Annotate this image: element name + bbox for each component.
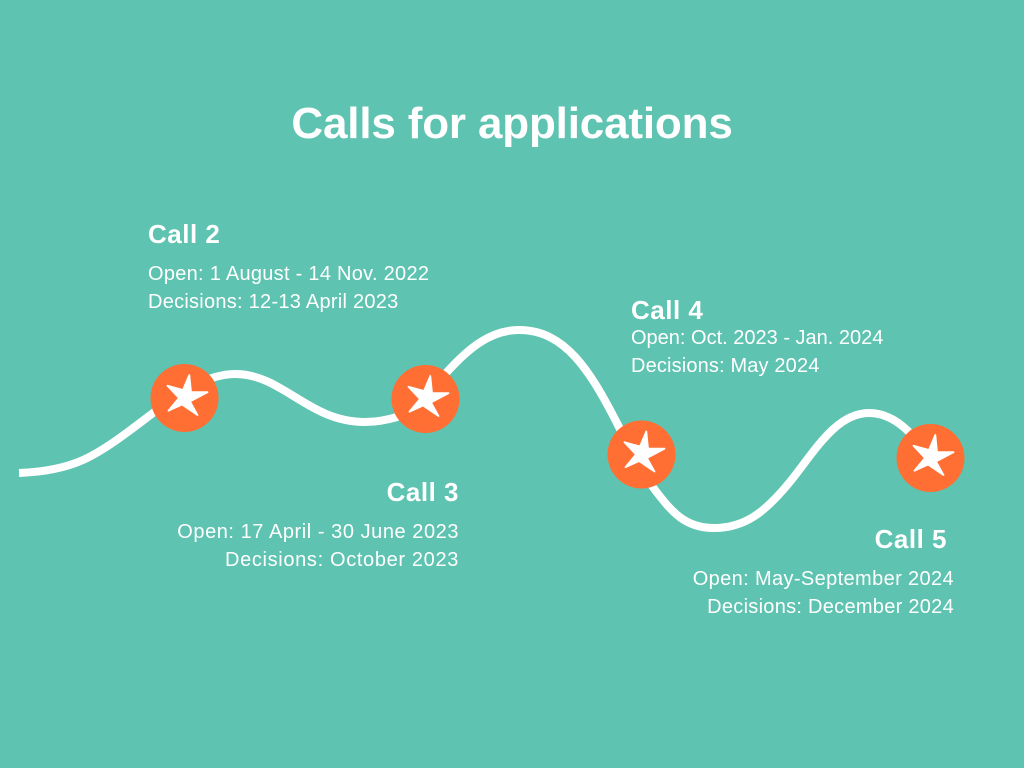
call 4 heading: Call 4 [631, 295, 703, 325]
call 3 dates: Decisions: October 2023 [225, 549, 459, 571]
call 2 heading: Call 2 [148, 219, 220, 249]
call 4 dates: Decisions: May 2024 [631, 355, 820, 377]
marker: call 3 [392, 365, 460, 433]
call 3 dates: Open: 17 April - 30 June 2023 [177, 521, 459, 543]
call 5 heading: Call 5 [875, 524, 947, 554]
marker: call 2 [150, 364, 218, 432]
call 2 dates: Open: 1 August - 14 Nov. 2022 [148, 263, 429, 285]
call 2 dates: Decisions: 12-13 April 2023 [148, 291, 398, 313]
title: Calls for applications [291, 99, 733, 148]
call 4 dates: Open: Oct. 2023 - Jan. 2024 [631, 327, 883, 349]
call 4 dates [631, 327, 883, 377]
call 5 dates: Open: May-September 2024 [693, 568, 954, 590]
timeline curve [19, 330, 909, 528]
call 3 heading: Call 3 [387, 477, 459, 507]
marker: call 4 [608, 420, 676, 488]
call 3 dates [177, 521, 459, 571]
call 5 dates [693, 568, 954, 618]
marker: call 5 [896, 424, 964, 492]
call 5 dates: Decisions: December 2024 [707, 596, 954, 618]
call 2 dates [148, 263, 429, 313]
